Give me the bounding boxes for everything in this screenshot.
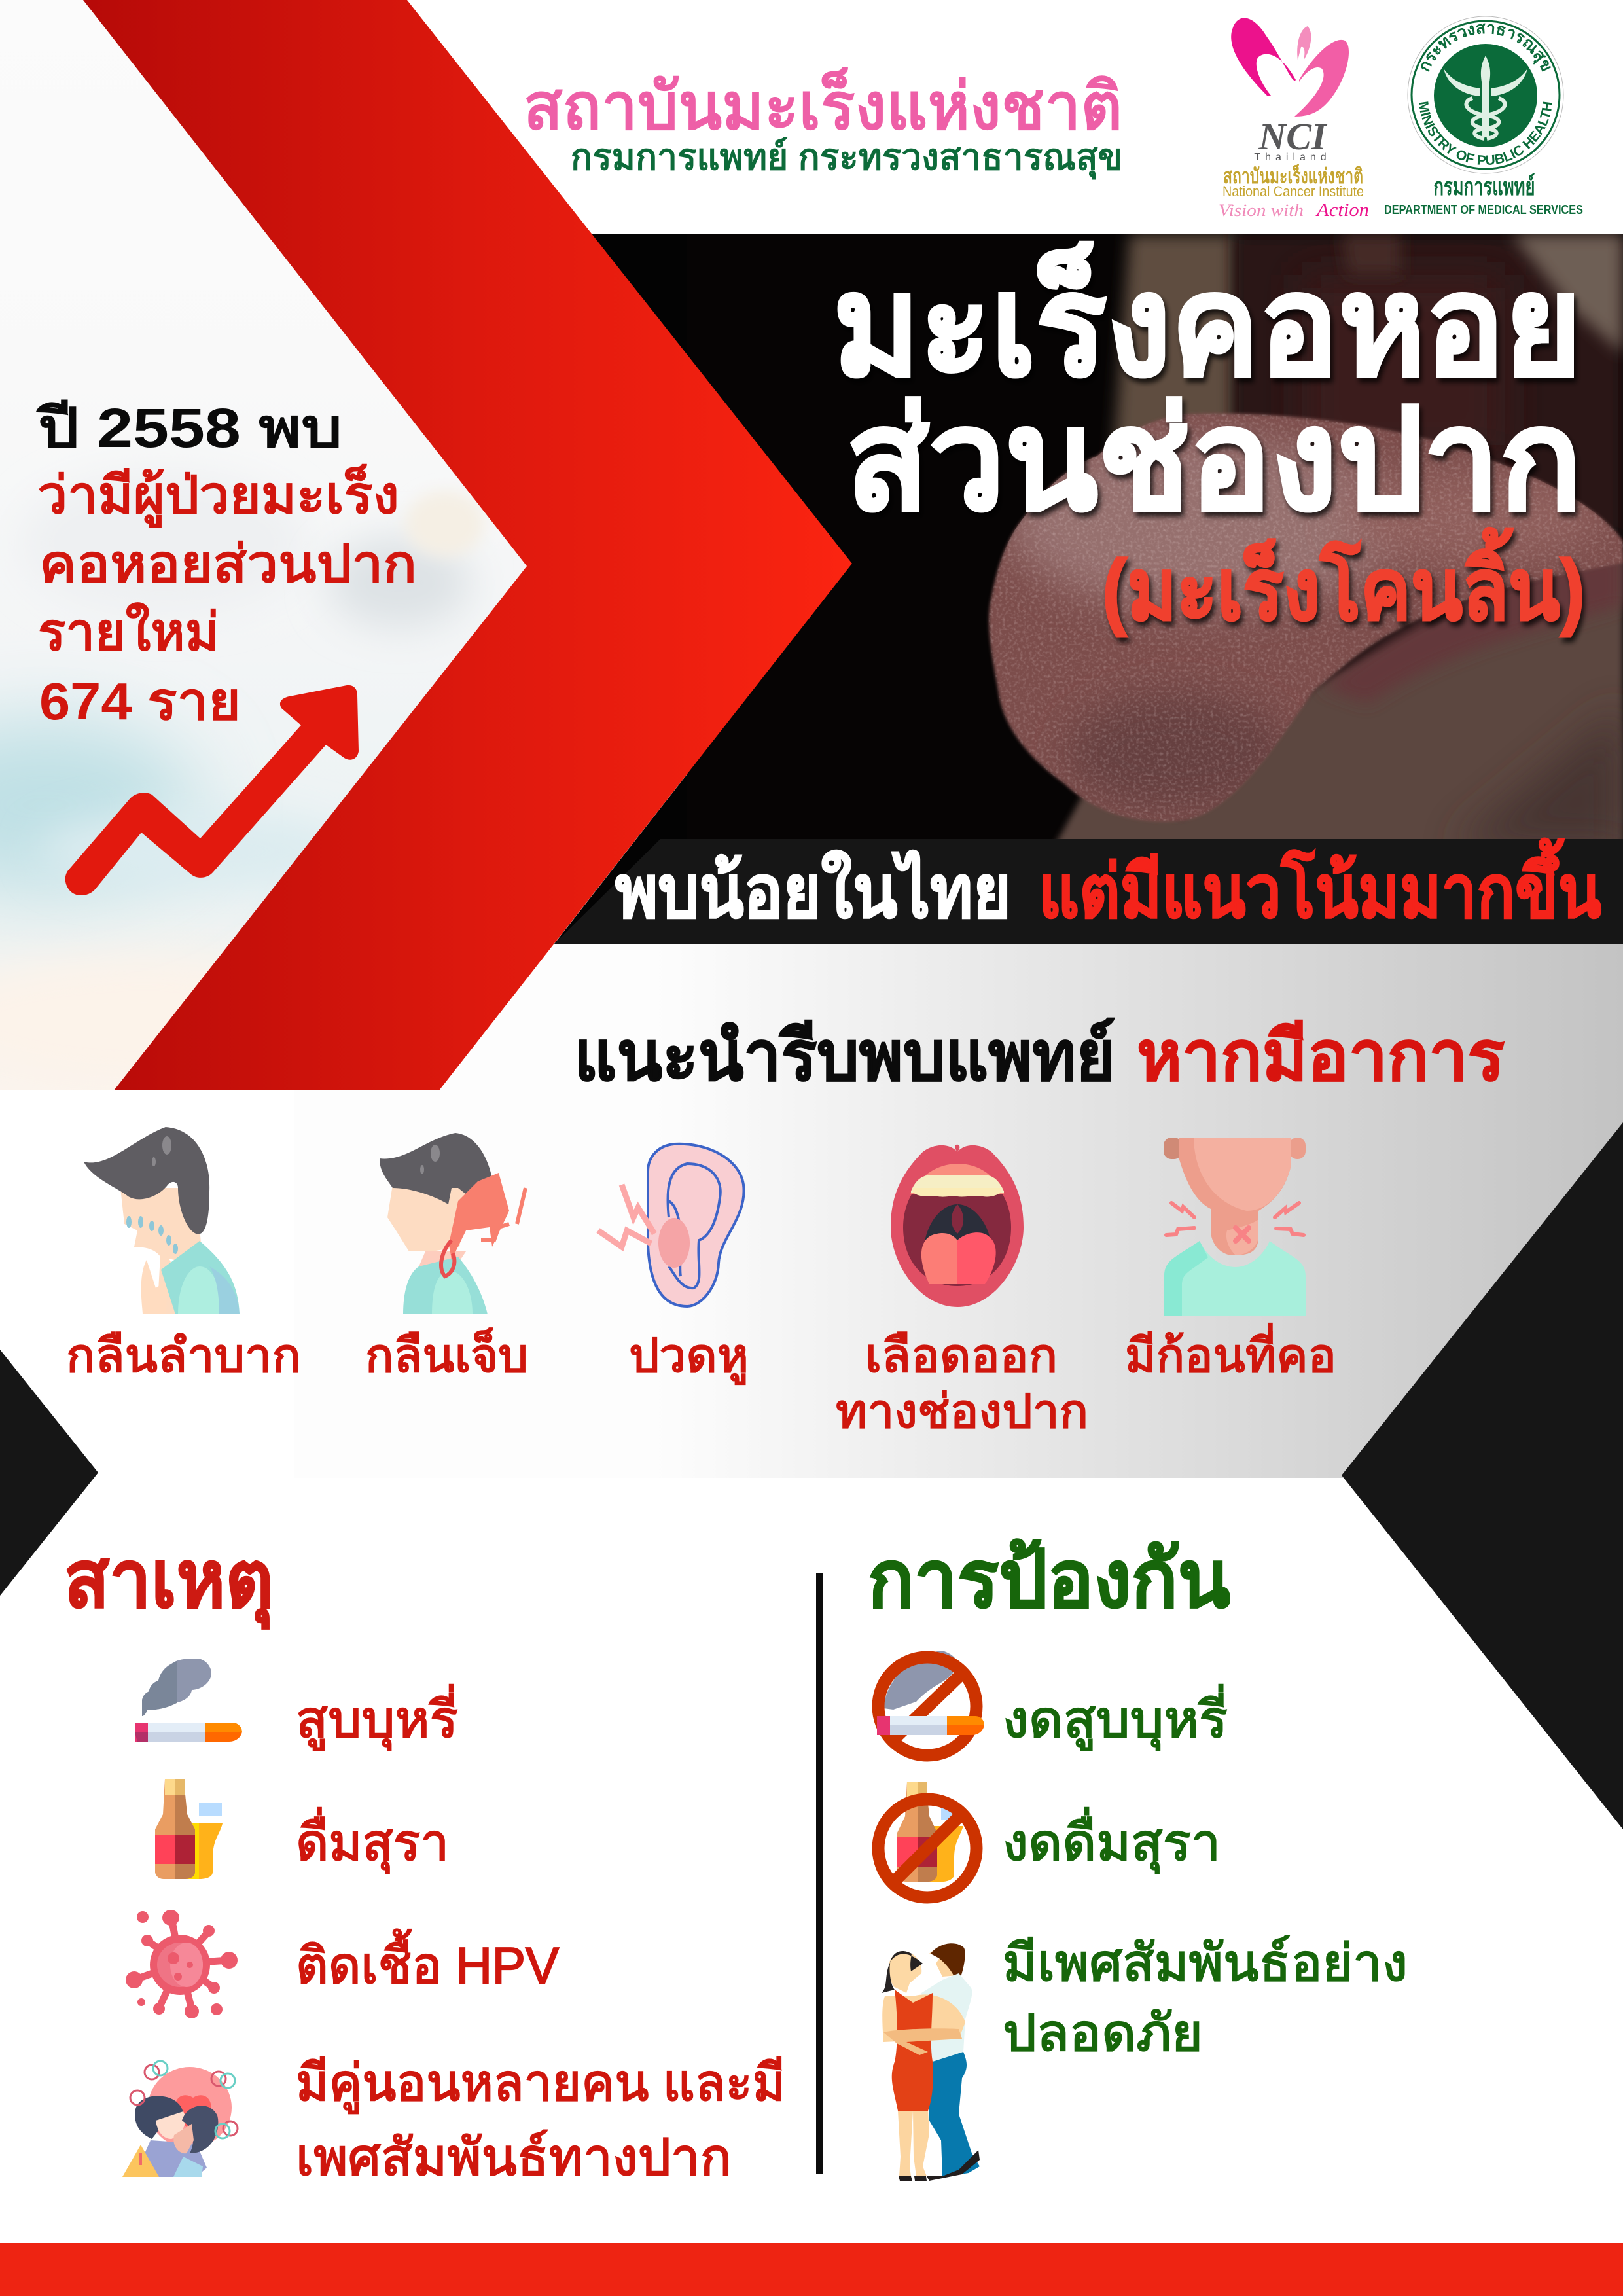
heading: see a doctor: แนะนำรีบพบแพทย์ bbox=[574, 1018, 1115, 1095]
logo: Ministry of Public Health seal: MINISTRY OF PUBLIC HEALTH bbox=[1419, 101, 1552, 165]
logo: National Cancer Institute: NCI bbox=[1258, 115, 1328, 158]
title bbox=[833, 242, 1585, 637]
logo: Ministry of Public Health seal bbox=[1384, 16, 1583, 217]
icon: no alcohol bbox=[878, 1782, 976, 1897]
text: quit smoking: งดสูบบุหรี่ bbox=[1003, 1685, 1228, 1751]
text: smoking: สูบบุหรี่ bbox=[296, 1685, 458, 1751]
text: multiple partners: เพศสัมพันธ์ทางปาก bbox=[296, 2128, 732, 2186]
photo: tongue close-up bbox=[687, 234, 1623, 848]
icon: ear pain bbox=[598, 1144, 744, 1306]
left black triangle bbox=[0, 1350, 98, 1596]
logo: National Cancer Institute bbox=[1219, 18, 1369, 221]
text: quit alcohol: งดดื่มสุรา bbox=[1003, 1808, 1221, 1874]
icon: couple bbox=[882, 1943, 980, 2181]
statistic text block: 674 ราย bbox=[39, 672, 241, 730]
statistic text block: คอหอยส่วนปาก bbox=[39, 535, 417, 593]
panel: blurred clinic background bbox=[0, 429, 526, 1090]
bottom red band bbox=[0, 2243, 1623, 2296]
icon: trend arrow bbox=[65, 685, 359, 895]
icon: cigarette bbox=[135, 1659, 242, 1742]
text: alcohol: ดื่มสุรา bbox=[296, 1808, 449, 1874]
red chevron bbox=[83, 0, 852, 1090]
text: safe sex: ปลอดภัย bbox=[1003, 2004, 1203, 2062]
title: มะเร็งคอหอย bbox=[833, 242, 1582, 404]
icon: alcohol bbox=[155, 1779, 223, 1879]
icon: neck lump bbox=[1164, 1138, 1306, 1316]
heading: see a doctor bbox=[574, 1018, 1505, 1095]
subtitle strip text: พบน้อยในไทย bbox=[615, 850, 1011, 933]
statistic text block: ว่ามีผู้ป่วยมะเร็ง bbox=[37, 463, 399, 528]
text: multiple partners bbox=[296, 2054, 785, 2186]
title: ส่วนช่องปาก bbox=[846, 381, 1582, 539]
logo: National Cancer Institute: Action bbox=[1315, 200, 1369, 221]
header: institute name: สถาบันมะเร็งแห่งชาติ bbox=[524, 67, 1122, 143]
icon: HPV virus bbox=[126, 1910, 238, 2018]
right black triangle bbox=[1342, 1122, 1623, 1829]
panel: grey gradient symptoms band bbox=[294, 944, 1623, 1478]
panel: black title area bbox=[554, 234, 1623, 944]
statistic text block: ปี 2558 พบ bbox=[36, 397, 342, 459]
logo: National Cancer Institute: Thailand bbox=[1254, 152, 1331, 163]
text: multiple partners: มีคู่นอนหลายคน และมี bbox=[296, 2054, 785, 2113]
symptom labels: ทางช่องปาก bbox=[836, 1386, 1088, 1438]
logo: Ministry of Public Health seal: DEPARTMENT OF MEDICAL SERVICES bbox=[1384, 203, 1583, 217]
logo: Ministry of Public Health seal: กระทรวงสาธารณสุข bbox=[1421, 24, 1551, 72]
statistic text block: รายใหม่ bbox=[38, 601, 219, 661]
logo: National Cancer Institute: สถาบันมะเร็งแห่งชาติ bbox=[1223, 163, 1363, 188]
logo: National Cancer Institute: Vision with bbox=[1219, 201, 1304, 220]
icon: painful swallowing bbox=[380, 1133, 526, 1314]
text: safe sex: มีเพศสัมพันธ์อย่าง bbox=[1003, 1934, 1408, 1992]
icon: bleeding mouth bbox=[891, 1145, 1024, 1307]
symptom labels: มีก้อนที่คอ bbox=[1125, 1323, 1336, 1382]
heading: prevention: การป้องกัน bbox=[868, 1535, 1230, 1624]
statistic text block bbox=[36, 397, 417, 730]
icon: multiple partners bbox=[122, 2061, 238, 2177]
divider line bbox=[816, 1573, 823, 2174]
subtitle strip text bbox=[615, 838, 1601, 933]
heading: causes: สาเหตุ bbox=[64, 1535, 274, 1629]
logo: Ministry of Public Health seal: กรมการแพทย์ bbox=[1433, 173, 1535, 201]
symptom labels: กลืนเจ็บ bbox=[365, 1328, 528, 1382]
header: institute name: กรมการแพทย์ กระทรวงสาธารณสุข bbox=[571, 136, 1122, 180]
heading: see a doctor: หากมีอาการ bbox=[1137, 1018, 1505, 1095]
logo: National Cancer Institute: National Cancer Institute bbox=[1222, 183, 1364, 200]
icon: difficulty swallowing bbox=[84, 1127, 240, 1314]
strip: subtitle background bbox=[554, 839, 1623, 944]
symptom labels bbox=[66, 1323, 1336, 1438]
symptom labels: ปวดหู bbox=[629, 1330, 749, 1384]
symptom labels: กลืนลำบาก bbox=[66, 1330, 301, 1382]
header: institute name bbox=[524, 67, 1122, 180]
icon: no smoking bbox=[877, 1651, 984, 1755]
text: HPV infection: ติดเชื้อ HPV bbox=[296, 1929, 559, 1994]
text: safe sex bbox=[1003, 1934, 1408, 2062]
symptom labels: เลือดออก bbox=[865, 1330, 1058, 1382]
